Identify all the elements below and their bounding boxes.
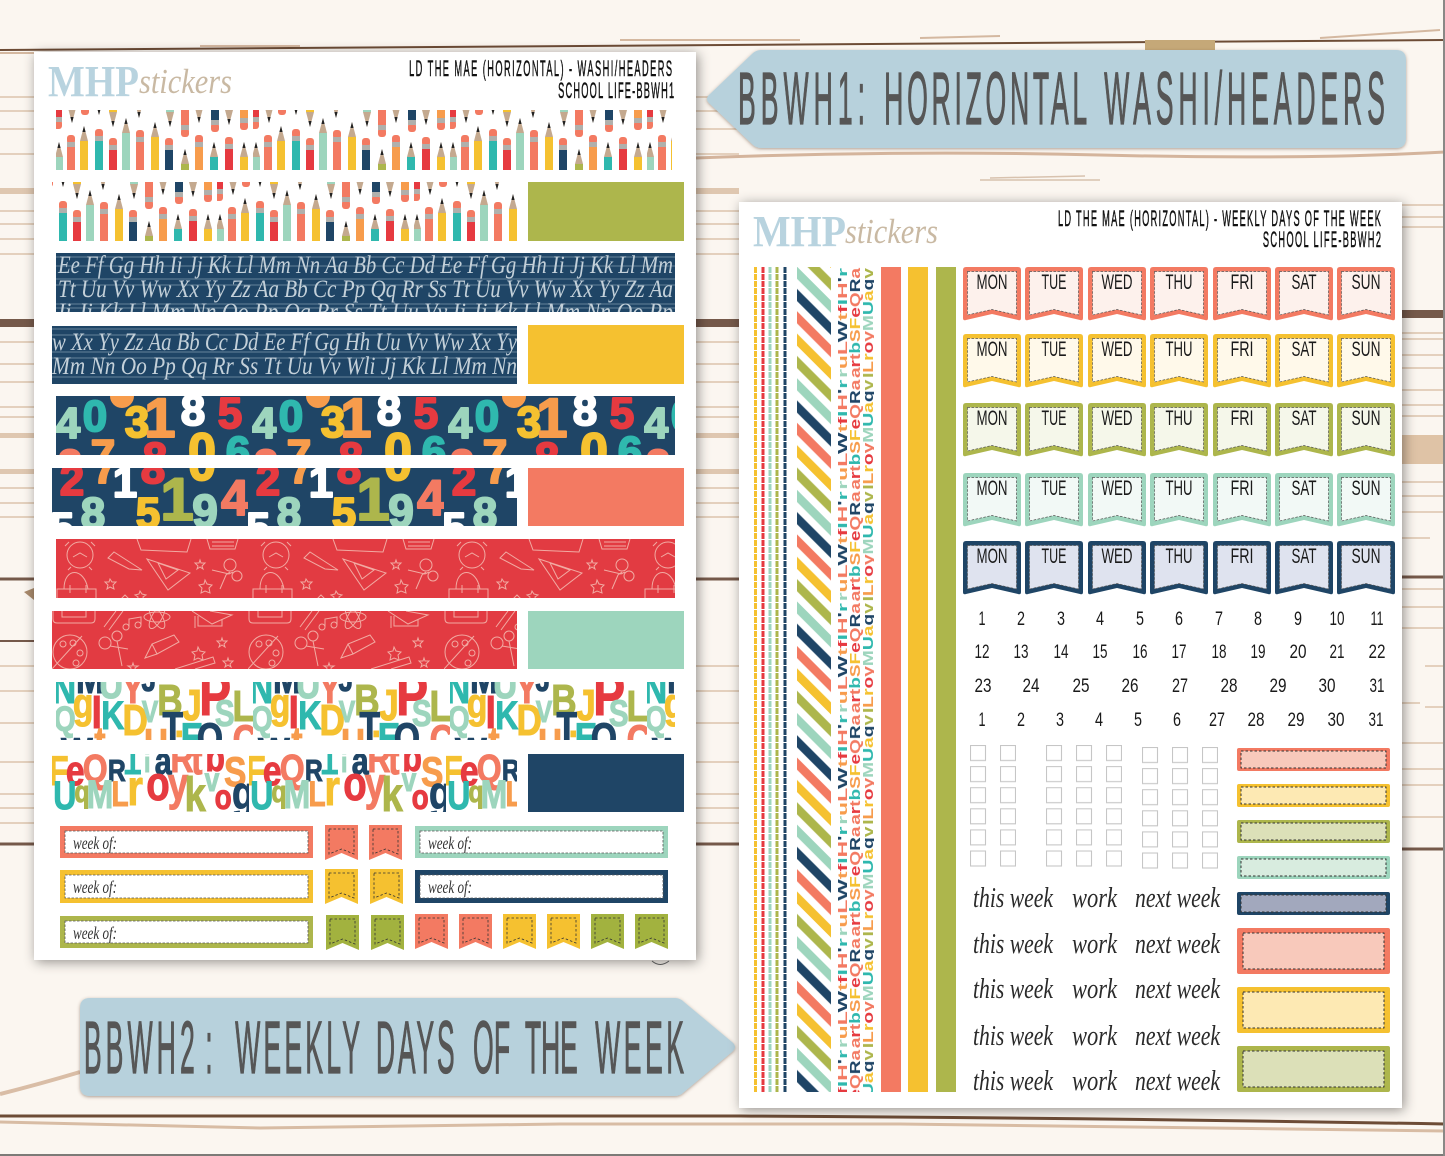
week of labels [60, 826, 668, 948]
day flags: coral row: SUN [1352, 271, 1380, 294]
date numbers: 8 [1254, 609, 1262, 630]
day flags: mint row: THU [1166, 477, 1192, 500]
script words: this week, work, next week: work [1072, 882, 1118, 914]
day flags: coral row: WED [1102, 271, 1132, 294]
day flags: mint row [963, 473, 1395, 526]
date numbers: 5 [1136, 609, 1144, 630]
script words: this week, work, next week: next week [1135, 1065, 1221, 1097]
day flags: coral row: TUE [1042, 271, 1066, 294]
date numbers: 2 [1017, 710, 1025, 731]
day flags: olive row: FRI [1230, 407, 1254, 430]
date numbers: 17 [1172, 642, 1186, 663]
dashed label stickers [1237, 748, 1390, 1092]
day flags: yellow row: FRI [1230, 338, 1254, 361]
day flags: olive row: MON [976, 407, 1008, 430]
day flags: yellow row: MON [976, 338, 1008, 361]
day flags: coral row: SAT [1292, 271, 1317, 294]
date numbers: 1 [978, 710, 986, 731]
day flags: olive row: THU [1166, 407, 1192, 430]
logo: MHP stickers [753, 207, 938, 256]
day flags: coral row [963, 267, 1395, 320]
washi strip: navy cursive 2: w Xx Yy Zz Aa Bb Cc Dd Ee Ff Gg Hh Uu Vv Ww Xx Yy [52, 329, 518, 356]
sheet title [409, 56, 674, 103]
script words: this week, work, next week: this week [973, 1020, 1054, 1052]
script words: this week, work, next week: next week [1135, 928, 1221, 960]
logo: MHP stickers: stickers [139, 62, 232, 101]
day flags: yellow row: WED [1102, 338, 1132, 361]
day flags: mint row: SUN [1352, 477, 1380, 500]
script words: this week, work, next week: work [1072, 928, 1118, 960]
day flags: mint row: TUE [1042, 477, 1066, 500]
date numbers: 10 [1330, 609, 1344, 630]
day flags: olive row: WED [1102, 407, 1132, 430]
washi strip: navy cursive 2 [51, 326, 518, 384]
date numbers: 13 [1014, 642, 1028, 663]
date numbers: 25 [1072, 676, 1090, 697]
date numbers: 16 [1132, 642, 1148, 663]
script words: this week, work, next week: this week [973, 973, 1054, 1005]
arrow banner: BBWH1: WASHI/HEADERS [1104, 57, 1385, 140]
washi strip: school doodles 2 [52, 611, 517, 669]
logo: MHP stickers [48, 57, 232, 106]
day flags: olive row: SUN [1352, 407, 1380, 430]
washi strip: navy cursive 1: Ee Ff Gg Hh Ii Jj Kk Ll Mm Nn Aa Bb Cc Dd Ee Ff Gg Hh Ii Jj Kk Ll Mm [57, 252, 673, 279]
arrow banner: BBWH2: DAYS [376, 1006, 455, 1089]
day flags: navy row [963, 541, 1395, 594]
script words: this week, work, next week: this week [973, 928, 1054, 960]
date numbers: 22 [1368, 642, 1386, 663]
date numbers [974, 609, 1386, 731]
day flags: navy row: FRI [1230, 545, 1254, 568]
sticker sheet: BBWH2 weekly days of the week [739, 202, 1402, 1108]
arrow banner: BBWH2: THE [525, 1006, 578, 1089]
date numbers: 27 [1172, 676, 1188, 697]
washi strip: navy cursive 1 [56, 253, 675, 312]
script words: this week, work, next week: work [1072, 973, 1118, 1005]
date numbers: 6 [1173, 710, 1181, 731]
day flags: coral row: THU [1166, 271, 1192, 294]
arrow banner: BBWH1: HORIZONTAL [884, 57, 1087, 140]
checkbox grid [970, 745, 1218, 870]
week of labels: week of: [73, 923, 117, 943]
date numbers: 30 [1328, 710, 1344, 731]
date numbers: 24 [1022, 676, 1040, 697]
script words: this week, work, next week: this week [973, 1065, 1054, 1097]
day flags: coral row: MON [976, 271, 1008, 294]
washi strip: alphabet 2 [52, 754, 517, 812]
sheet title: SCHOOL LIFE-BBWH2 [1263, 227, 1381, 252]
date numbers: 7 [1215, 609, 1223, 630]
washi strip: pencils 1 [56, 110, 672, 170]
logo: MHP stickers: MHP [48, 57, 139, 106]
date numbers: 30 [1318, 676, 1336, 697]
date numbers: 1 [978, 609, 986, 630]
date numbers: 5 [1134, 710, 1142, 731]
day flags: mint row: WED [1102, 477, 1132, 500]
date numbers: 28 [1248, 710, 1264, 731]
date numbers: 9 [1294, 609, 1302, 630]
day flags: navy row: WED [1102, 545, 1132, 568]
header block: navy [528, 754, 684, 812]
date numbers: 11 [1370, 609, 1384, 630]
date numbers: 18 [1212, 642, 1226, 663]
day flags: coral row: FRI [1230, 271, 1254, 294]
arrow banner: BBWH2: BBWH2 [84, 1006, 195, 1089]
logo: MHP stickers: MHP [753, 207, 846, 256]
small flag stickers [325, 825, 668, 950]
date numbers: 29 [1270, 676, 1286, 697]
day flags: olive row [963, 403, 1395, 456]
washi strip: numbers 2 [52, 468, 517, 526]
day flags: mint row: FRI [1230, 477, 1254, 500]
sheet title: LD THE MAE (HORIZONTAL) - WASHI/HEADERS [409, 56, 672, 81]
arrow banner: BBWH1: BBWH1: [738, 57, 865, 140]
week of labels: week of: [73, 877, 117, 897]
script words: this week, work, next week: next week [1135, 973, 1221, 1005]
arrow banner: BBWH2: WEEKLY [235, 1006, 360, 1089]
vertical solid bars [881, 267, 956, 1092]
date numbers: 3 [1057, 609, 1065, 630]
day flags: yellow row: SUN [1352, 338, 1380, 361]
small loop mark under sheet [652, 961, 669, 964]
sheet title: LD THE MAE (HORIZONTAL) - WEEKLY DAYS OF THE WEEK [1058, 206, 1381, 231]
header block: mint [528, 611, 684, 669]
date numbers: 12 [974, 642, 990, 663]
date numbers: 26 [1122, 676, 1138, 697]
date numbers: 21 [1330, 642, 1344, 663]
date numbers: 31 [1370, 676, 1384, 697]
logo: MHP stickers: stickers [845, 212, 938, 251]
washi strip: navy cursive 1: Ii Jj Kk Ll Mm Nn Oo Pp Qq Rr Ss Tt Uu Vv Ii Jj Kk Ll Mm Nn Oo Pp [57, 299, 673, 326]
day flags: olive row: SAT [1292, 407, 1317, 430]
arrow banner: BBWH2: WEEK [595, 1006, 684, 1089]
arrow banner: BBWH2 [80, 998, 735, 1096]
day flags: yellow row: SAT [1292, 338, 1317, 361]
day flags: yellow row [963, 334, 1395, 387]
washi strip: school doodles 1 [56, 539, 675, 598]
day flags: navy row: TUE [1042, 545, 1066, 568]
date numbers: 4 [1096, 609, 1104, 630]
day flags: mint row: MON [976, 477, 1008, 500]
arrow banner: BBWH2: OF [473, 1006, 510, 1089]
date numbers: 29 [1288, 710, 1304, 731]
script words: this week, work, next week [973, 882, 1221, 1097]
scalloped vertical borders [756, 267, 785, 1092]
sticker sheet: BBWH1 horizontal washi/headers [34, 52, 696, 960]
day flags: yellow row: TUE [1042, 338, 1066, 361]
sheet title: SCHOOL LIFE-BBWH1 [558, 78, 674, 103]
day flags: navy row: MON [976, 545, 1008, 568]
day flags: olive row: TUE [1042, 407, 1066, 430]
script words: this week, work, next week: next week [1135, 1020, 1221, 1052]
washi strip: navy cursive 1: Tt Uu Vv Ww Xx Yy Zz Aa Bb Cc Pp Qq Rr Ss Tt Uu Vv Ww Xx Yy Zz Aa [58, 276, 673, 303]
script words: this week, work, next week: work [1072, 1065, 1118, 1097]
header block: yellow [528, 325, 684, 384]
script words: this week, work, next week: next week [1135, 882, 1221, 914]
vertical alphabet washi [838, 267, 874, 1092]
date numbers: 19 [1250, 642, 1266, 663]
date numbers: 23 [974, 676, 992, 697]
vertical diagonal stripe washi [797, 267, 831, 1092]
day flags: mint row: SAT [1292, 477, 1317, 500]
script words: this week, work, next week: work [1072, 1020, 1118, 1052]
header block: olive [528, 182, 684, 241]
washi strip: numbers 1 [56, 396, 675, 455]
date numbers: 15 [1092, 642, 1108, 663]
date numbers: 14 [1054, 642, 1069, 663]
week of labels: week of: [428, 877, 472, 897]
arrow banner: BBWH1 [707, 50, 1406, 148]
date numbers: 28 [1220, 676, 1238, 697]
week of labels: week of: [73, 833, 117, 853]
day flags: navy row: THU [1166, 545, 1192, 568]
header block: coral [528, 468, 684, 526]
day flags: navy row: SUN [1352, 545, 1380, 568]
date numbers: 3 [1056, 710, 1064, 731]
date numbers: 27 [1209, 710, 1225, 731]
washi strip: navy cursive 2: Mm Nn Oo Pp Qq Rr Ss Tt Uu Vv Wli Jj Kk Ll Mm Nn [51, 353, 517, 380]
week of labels: week of: [428, 833, 472, 853]
washi strip: alphabet 1 [56, 682, 675, 740]
script words: this week, work, next week: this week [973, 882, 1054, 914]
date numbers: 4 [1095, 710, 1103, 731]
washi strip: pencils 2 [52, 182, 517, 241]
day flags: navy row: SAT [1292, 545, 1317, 568]
date numbers: 31 [1368, 710, 1384, 731]
date numbers: 6 [1175, 609, 1183, 630]
sheet title [1058, 206, 1381, 252]
date numbers: 20 [1290, 642, 1306, 663]
day flags: yellow row: THU [1166, 338, 1192, 361]
date numbers: 2 [1017, 609, 1025, 630]
arrow banner: BBWH2: : [205, 1006, 213, 1089]
